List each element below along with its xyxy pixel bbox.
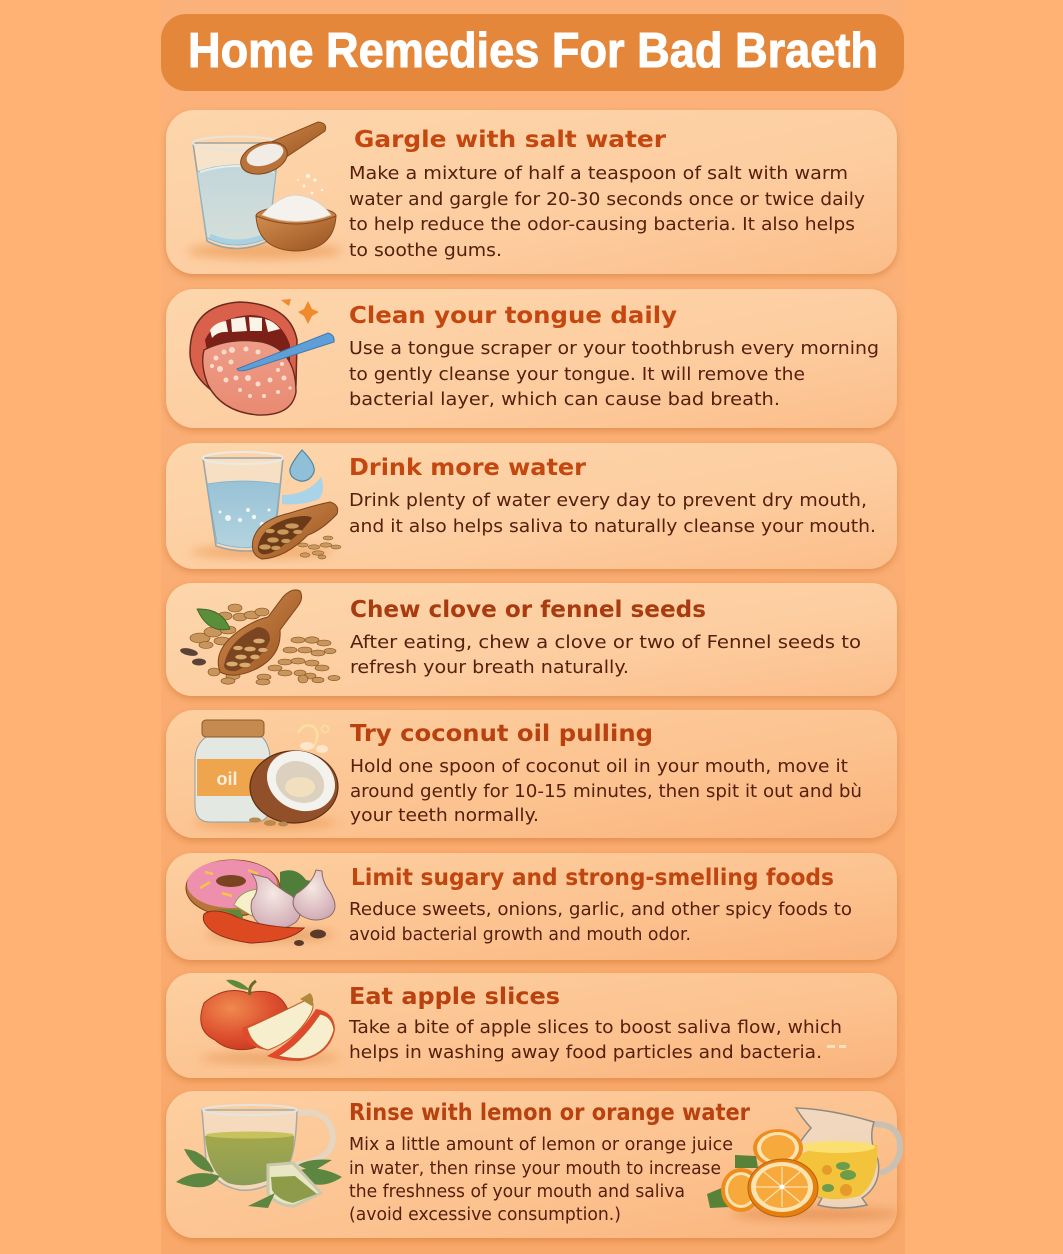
icon: orange juice pitcher and orange slices bbox=[707, 1108, 900, 1220]
heading: Drink more water bbox=[349, 455, 587, 481]
body text: water and gargle for 20-30 seconds once or twice daily bbox=[349, 190, 865, 210]
panel: rinse with lemon or orange water bbox=[166, 1091, 900, 1238]
icon: donut, garlic and chili bbox=[186, 860, 335, 946]
icon: green tea cup and tea bag bbox=[176, 1105, 342, 1208]
panel: coconut oil pulling bbox=[166, 710, 897, 838]
icon: open mouth, tongue and scraper bbox=[190, 299, 334, 415]
body text bbox=[349, 164, 865, 261]
heading: Chew clove or fennel seeds bbox=[350, 597, 706, 623]
panel: eat apple slices bbox=[166, 973, 897, 1078]
body text bbox=[349, 491, 876, 537]
body text bbox=[350, 757, 862, 826]
body text bbox=[348, 1018, 842, 1063]
body text: helps in washing away food particles and bacteria. bbox=[349, 1043, 822, 1063]
panel: gargle with salt water bbox=[166, 110, 897, 274]
body text: to soothe gums. bbox=[349, 241, 502, 261]
body text: (avoid excessive consumption.) bbox=[349, 1205, 621, 1225]
jar label: oil bbox=[216, 769, 238, 789]
panel: drink more water bbox=[166, 443, 897, 569]
body text bbox=[349, 339, 879, 410]
panel: limit sugary and strong-smelling foods bbox=[166, 853, 897, 960]
heading: Clean your tongue daily bbox=[349, 303, 677, 329]
body text bbox=[349, 1135, 733, 1225]
heading: Eat apple slices bbox=[349, 984, 560, 1010]
panel: chew clove or fennel seeds bbox=[166, 583, 897, 696]
body text: your teeth normally. bbox=[350, 806, 539, 826]
body text: Drink plenty of water every day to prevent dry mouth, bbox=[349, 491, 867, 511]
panel: clean your tongue bbox=[166, 289, 897, 428]
body text: bacterial layer, which can cause bad breath. bbox=[349, 390, 780, 410]
heading: Limit sugary and strong-smelling foods bbox=[351, 865, 834, 891]
heading: Rinse with lemon or orange water bbox=[349, 1100, 751, 1126]
title: Home Remedies For Bad Braeth bbox=[188, 24, 878, 78]
body text bbox=[349, 900, 852, 945]
icon: apple and slices bbox=[200, 980, 340, 1063]
body text: the freshness of your mouth and saliva bbox=[349, 1182, 685, 1202]
body text: Mix a little amount of lemon or orange juice bbox=[349, 1135, 733, 1155]
body text: refresh your breath naturally. bbox=[350, 658, 629, 678]
body text: around gently for 10-15 minutes, then spit it out and bù bbox=[350, 782, 862, 802]
body text: After eating, chew a clove or two of Fennel seeds to bbox=[350, 633, 861, 653]
body text: Use a tongue scraper or your toothbrush every morning bbox=[349, 339, 879, 359]
icon: oil jar and coconut bbox=[193, 720, 345, 829]
icon: salt water glass, spoon and bowl bbox=[187, 122, 343, 259]
body text: to gently cleanse your tongue. It will remove the bbox=[349, 365, 805, 385]
small sparkle marks bbox=[827, 1045, 846, 1048]
heading: Gargle with salt water bbox=[354, 127, 667, 153]
heading: Try coconut oil pulling bbox=[350, 721, 653, 747]
body text: in water, then rinse your mouth to increase bbox=[349, 1159, 721, 1179]
body text: Take a bite of apple slices to boost saliva flow, which bbox=[348, 1018, 842, 1038]
body text: Make a mixture of half a teaspoon of salt with warm bbox=[349, 164, 848, 184]
title bar bbox=[161, 14, 904, 91]
body text bbox=[350, 633, 861, 678]
body text: avoid bacterial growth and mouth odor. bbox=[349, 925, 691, 945]
icon: water glass, drop and seed scoop bbox=[190, 450, 341, 559]
body text: Reduce sweets, onions, garlic, and other spicy foods to bbox=[349, 900, 852, 920]
body text: and it also helps saliva to naturally cleanse your mouth. bbox=[349, 517, 876, 537]
body text: to help reduce the odor-causing bacteria. It also helps bbox=[349, 215, 855, 235]
body text: Hold one spoon of coconut oil in your mouth, move it bbox=[350, 757, 848, 777]
icon: scoop of seeds with leaf bbox=[179, 590, 340, 685]
central panel bbox=[161, 0, 905, 1254]
